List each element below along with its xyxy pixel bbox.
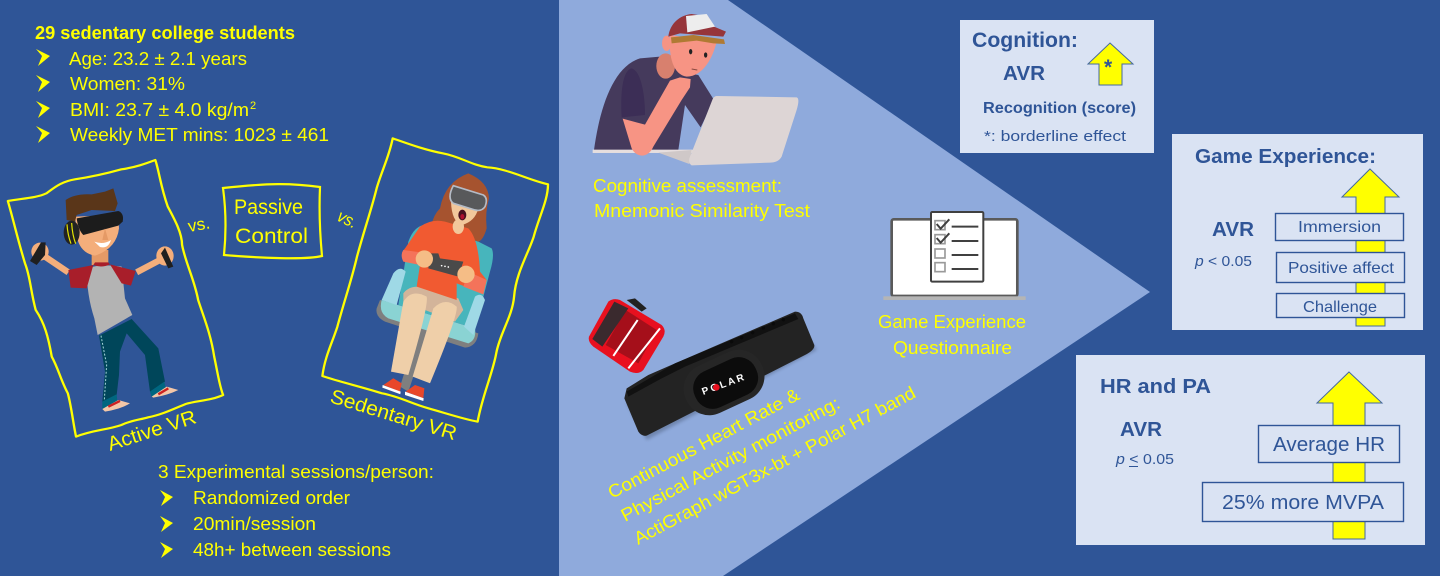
text block: participant characteristics: Weekly MET mins: 1023 ± 461 (70, 125, 329, 145)
icon: upward arrow (1342, 169, 1399, 326)
box: positive affect: Positive affect (1288, 260, 1395, 277)
icon: upward arrow with asterisk: * (1104, 56, 1113, 79)
label: AVR: AVR (1120, 419, 1163, 441)
text block: participant characteristics (35, 23, 329, 145)
label: AVR: AVR (1212, 219, 1255, 241)
icon: laptop with questionnaire (883, 212, 1026, 300)
note: borderline effect: *: borderline effect (984, 129, 1126, 145)
text block: game experience questionnaire (878, 312, 1026, 358)
box: 25% more MVPA: 25% more MVPA (1222, 492, 1385, 514)
text block: cognitive assessment (593, 176, 810, 221)
label: recognition score: Recognition (score) (983, 100, 1136, 117)
frame: sedentary VR (322, 138, 548, 422)
heading: HR and PA: HR and PA (1100, 376, 1211, 398)
text block: participant characteristics: BMI: 23.7 ± 4.0 kg/m (70, 100, 249, 120)
text block: cognitive assessment: Mnemonic Similarity Test (594, 201, 810, 221)
text block: participant characteristics: Age: 23.2 ± 2.1 years (69, 49, 247, 69)
frame: active VR (8, 160, 223, 437)
icon: ActiGraph red monitor (589, 298, 665, 373)
label: AVR: AVR (1003, 63, 1046, 85)
text block: continuous heart rate and physical activity monitoring: ActiGraph wGT3x-bt + Polar H7 band (630, 383, 919, 549)
icon: upward arrow (1317, 372, 1382, 539)
label: vs. left: vs. (186, 213, 211, 236)
box: passive control (223, 184, 322, 258)
text block: continuous heart rate and physical activity monitoring: Physical Activity monitoring: (617, 393, 843, 526)
box: passive control: Passive (234, 196, 303, 219)
text block: game experience questionnaire: Game Experience (878, 312, 1026, 332)
heading: game experience: Game Experience: (1195, 146, 1376, 168)
panel: game experience result (1172, 134, 1423, 330)
text block: game experience questionnaire: Questionnaire (893, 338, 1012, 358)
text block: experimental sessions (158, 462, 434, 560)
label: p value: p < 0.05 (1194, 254, 1252, 270)
heading: cognition: Cognition: (972, 29, 1078, 52)
icon: upward arrow with asterisk (1088, 43, 1133, 85)
panel: heart rate and physical activity result (1076, 355, 1425, 545)
label: vs. right: vs. (334, 207, 361, 232)
text block: cognitive assessment: Cognitive assessment: (593, 176, 782, 196)
box: challenge: Challenge (1303, 299, 1377, 316)
box: 25% more MVPA (1202, 482, 1404, 522)
panel: central intervention triangle (559, 0, 1150, 576)
text block: experimental sessions: 48h+ between sessions (193, 540, 391, 560)
label: Active VR: Active VR (105, 406, 199, 456)
panel: cognition result (960, 20, 1154, 153)
icon: Polar H7 chest strap: POLAR (701, 372, 746, 398)
icon: Polar H7 chest strap (624, 312, 817, 440)
label: p value: p < 0.05 (1115, 452, 1174, 468)
label: Sedentary VR: Sedentary VR (328, 386, 459, 445)
icon: seated player figure (376, 173, 493, 401)
text block: experimental sessions: 3 Experimental sessions/person: (158, 462, 434, 482)
box: positive affect (1276, 252, 1404, 282)
illustration: man thinking at a laptop (593, 14, 798, 165)
icon: active player figure (30, 188, 178, 412)
box: immersion (1276, 214, 1404, 240)
box: immersion: Immersion (1298, 219, 1381, 236)
box: challenge (1276, 294, 1404, 318)
text block: participant characteristics: Women: 31% (70, 74, 185, 94)
text block: continuous heart rate and physical activity monitoring: Continuous Heart Rate & (604, 384, 803, 503)
text block: participant characteristics: 29 sedentary college students (35, 23, 295, 43)
text block: experimental sessions: Randomized order (193, 488, 350, 508)
text block: experimental sessions: 20min/session (193, 514, 316, 534)
text block: participant characteristics: 2 (250, 100, 256, 112)
box: average HR (1258, 426, 1400, 462)
box: passive control: Control (235, 225, 308, 248)
box: average HR: Average HR (1273, 434, 1385, 456)
